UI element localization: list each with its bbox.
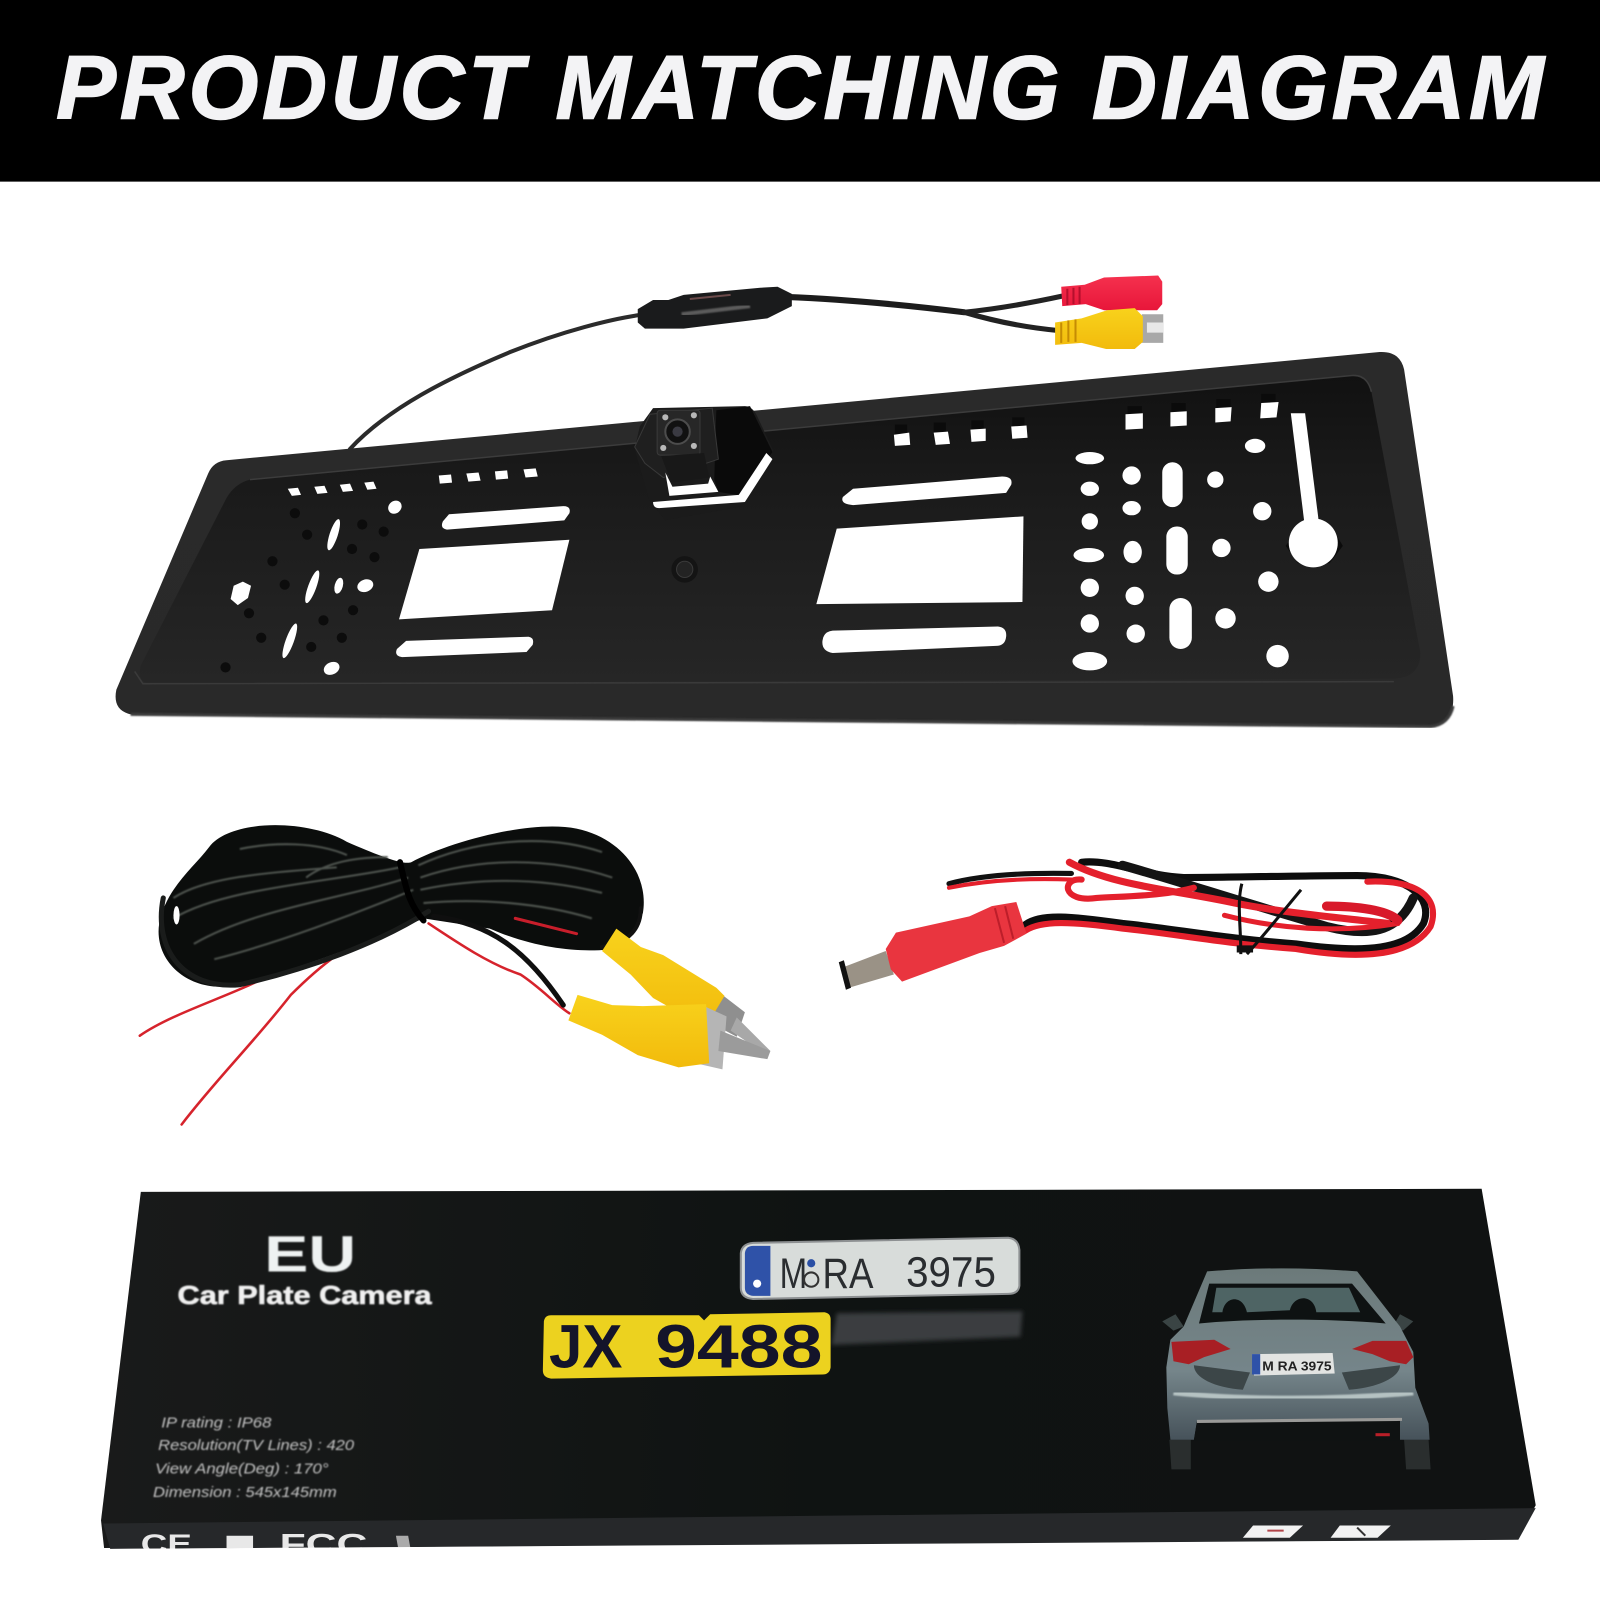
right key slot [1286,413,1343,567]
yellow plate: 9488 [655,1312,822,1380]
license plate frame with camera and cable [116,276,1453,727]
white mask below box edge [0,1540,1600,1600]
right top square holes [894,394,1279,446]
red RCA socket [1061,276,1162,310]
specifications: Dimension : 545x145mm [153,1485,337,1501]
yellow RCA plug lower [568,995,770,1069]
cable ties [1237,884,1301,954]
right mounting holes [1072,439,1289,670]
specifications [153,1416,355,1501]
two-core wire loop [949,862,1433,955]
box edge labels [1243,1526,1391,1538]
left blind holes [220,508,389,672]
car illustration [1162,1268,1431,1469]
camera lead cable [350,296,1063,449]
certification marks: CE [141,1529,192,1559]
box front edge [103,1508,1536,1549]
title banner [0,0,1600,182]
white plate: M [780,1250,807,1298]
frame outer rim [116,352,1453,727]
box body [101,1189,1536,1548]
video extension cable [140,825,770,1124]
waterproof connector [638,287,792,329]
yellow RCA plug upper [602,929,770,1053]
left mounting holes [231,468,538,677]
yellow RCA socket [1055,308,1163,349]
plate reflection [832,1311,1022,1345]
car illustration: M RA 3975 [1262,1358,1332,1373]
red trigger wires [140,923,602,1124]
right slots and window [816,477,1023,653]
certification marks: FCC [280,1529,367,1561]
specifications: View Angle(Deg) : 170° [155,1461,329,1477]
reversing camera [635,406,773,520]
coiled cable [159,825,644,987]
left slots and window [396,506,570,657]
centre screw [671,556,698,583]
white plate [741,1238,1019,1299]
specifications: Resolution(TV Lines) : 420 [158,1438,355,1454]
frame recess [140,375,1420,684]
certification marks [141,1529,410,1561]
yellow plate [543,1312,831,1380]
white plate: RA [822,1250,874,1298]
model heading: EU [264,1225,356,1282]
DC barrel plug [839,902,1027,990]
power cable [839,862,1433,990]
title: PRODUCT MATCHING DIAGRAM [56,38,1546,138]
white plate: 3975 [906,1249,996,1297]
product box [0,1189,1600,1600]
product name: Car Plate Camera [178,1282,433,1310]
yellow plate: JX [549,1312,623,1380]
specifications: IP rating : IP68 [161,1416,272,1432]
